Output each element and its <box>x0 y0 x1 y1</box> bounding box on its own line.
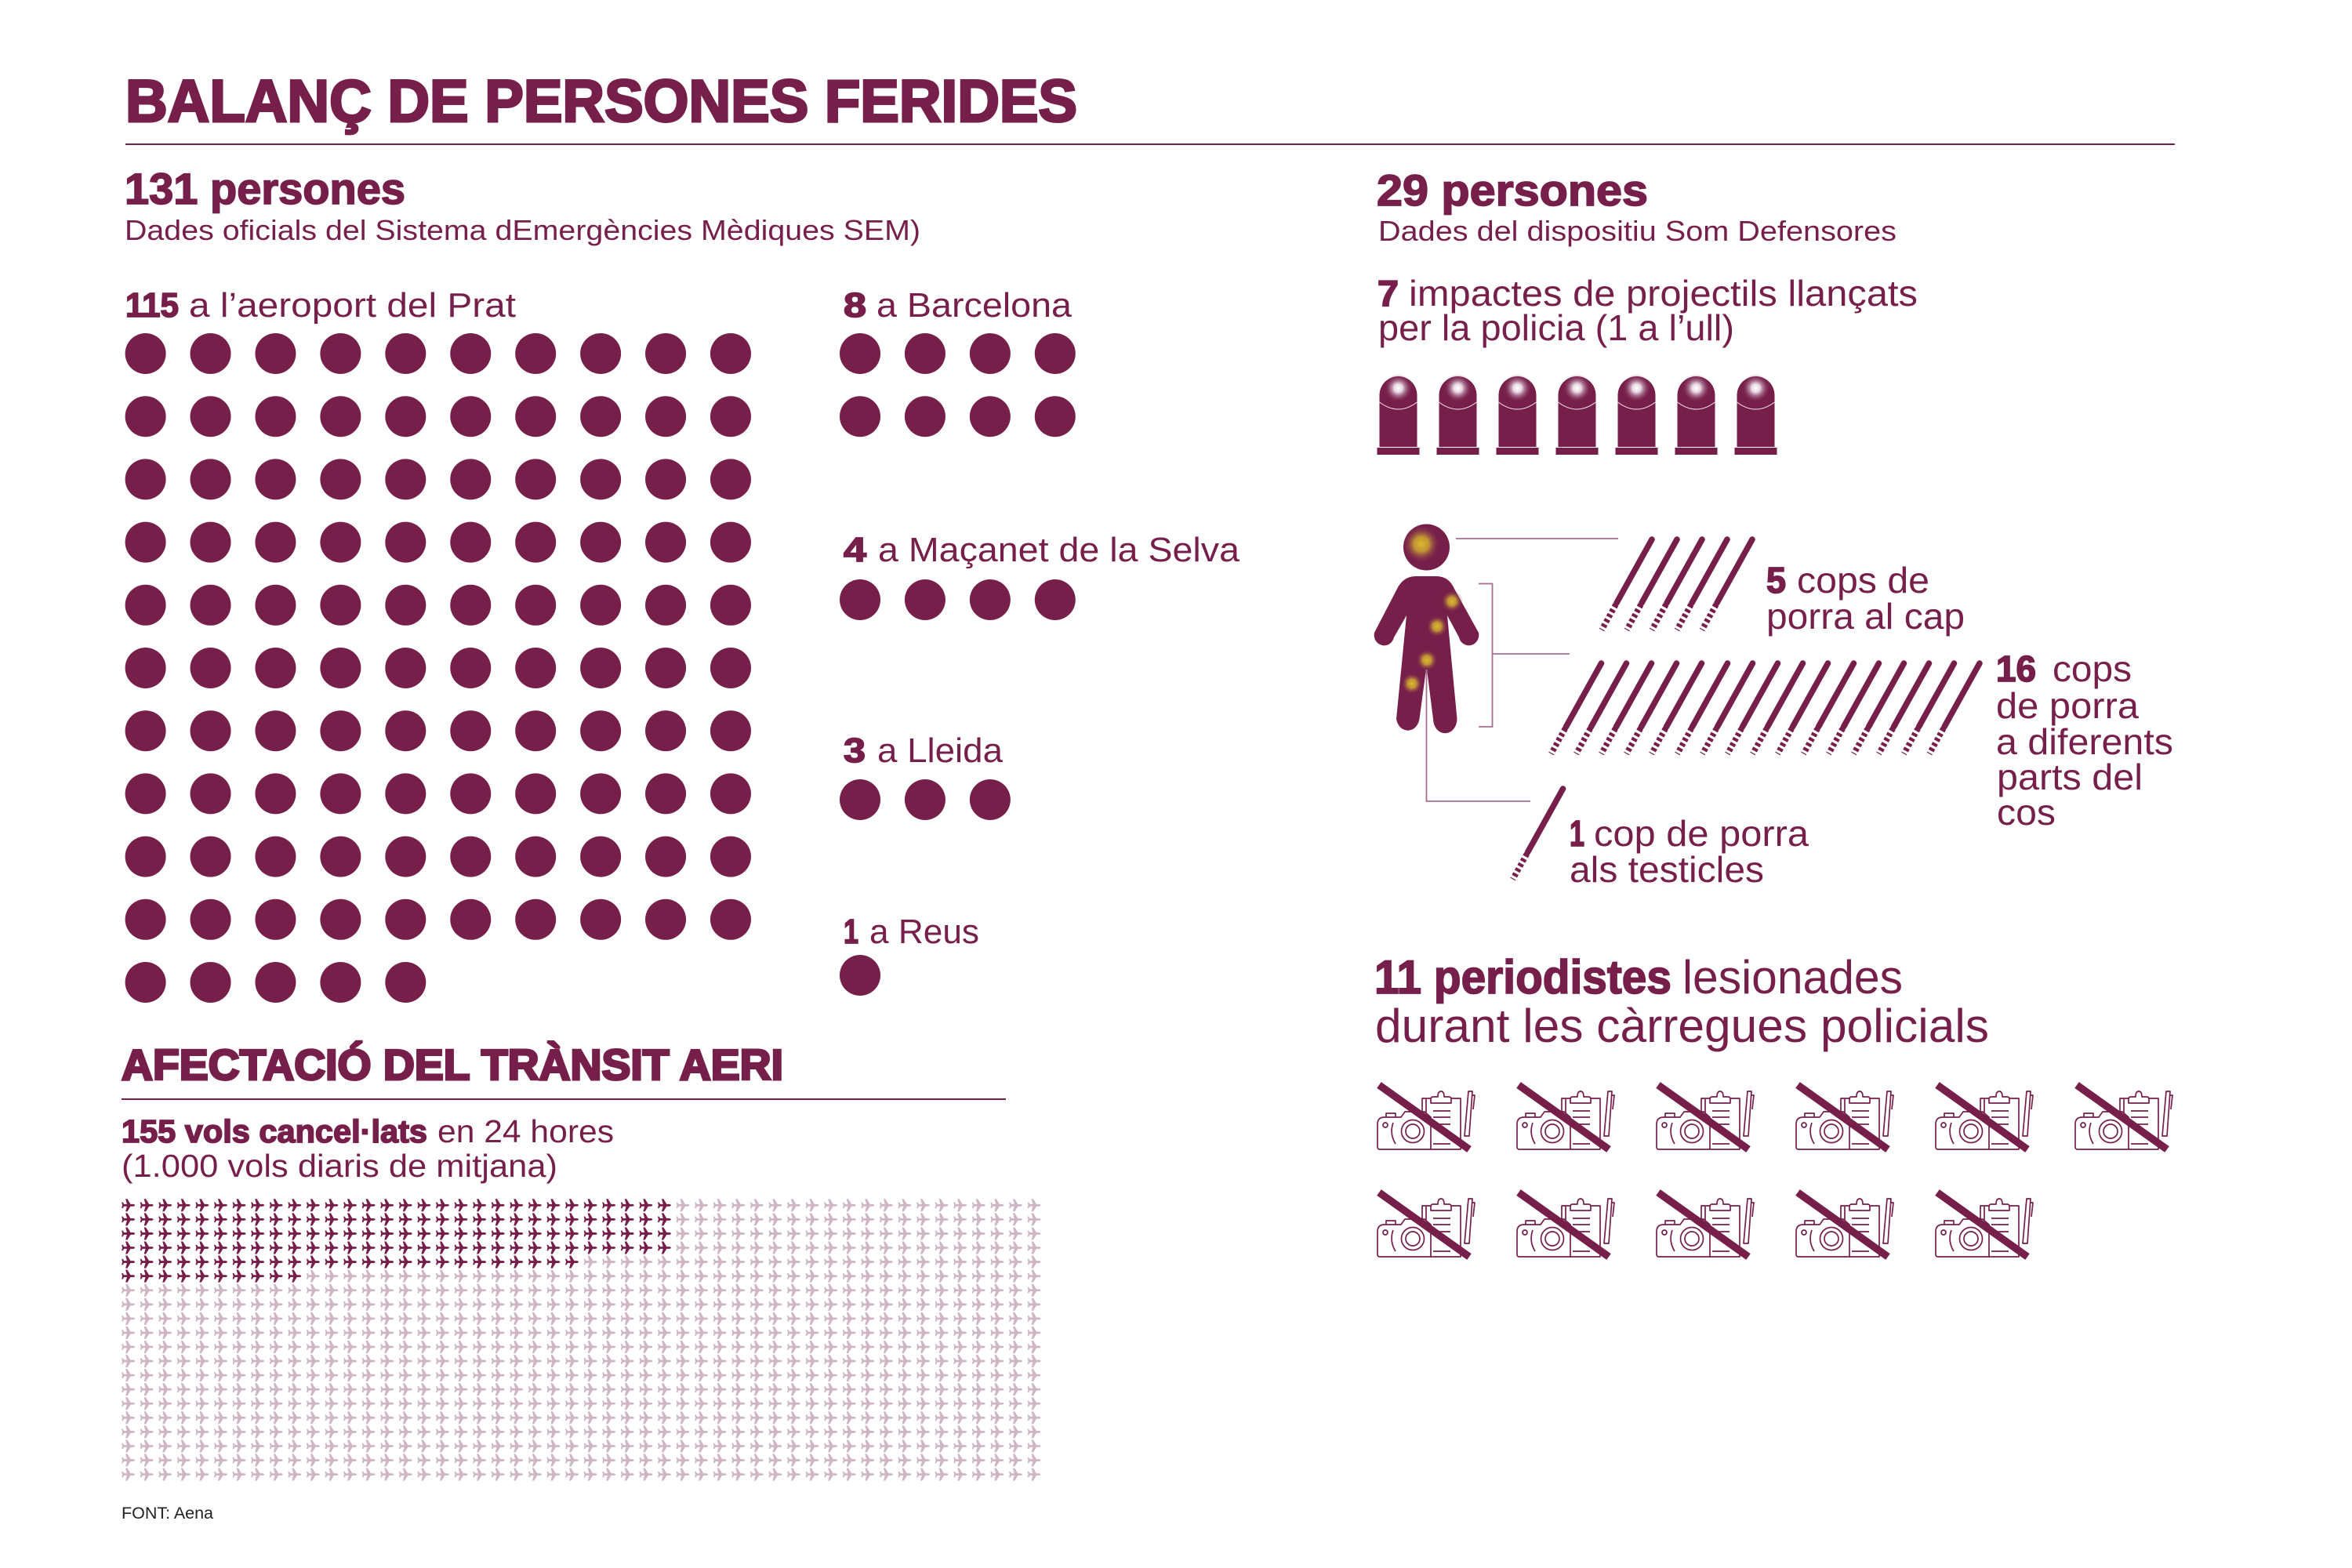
icon: 1 baton <box>1513 789 1563 880</box>
text: 7 projectile impacts: impactes de projectils llançats <box>1409 273 1918 314</box>
text: 1 baton hit to testicles: cop de porra <box>1594 813 1809 854</box>
heading: air traffic: AFECTACIÓ DEL TRÀNSIT AERI <box>122 1040 783 1089</box>
text: 1 baton hit to testicles: 1 <box>1570 813 1584 854</box>
heading: 131 persones: 131 persones <box>125 164 405 213</box>
label: 4 in Maçanet de la Selva: 4 <box>844 531 867 569</box>
panel: injured journalists <box>1374 951 2172 1257</box>
label: 115 at airport: a l’aeroport del Prat <box>189 286 516 325</box>
icons: 7 projectiles <box>1377 374 1777 455</box>
label: 8 in Barcelona: a Barcelona <box>877 286 1073 325</box>
label: 1 in Reus: a Reus <box>869 913 979 951</box>
heading: 11 journalists: lesionades <box>1682 951 1903 1004</box>
stat: 155 cancelled flights: en 24 hores <box>437 1113 614 1149</box>
dark planes: cancelled flights <box>122 1199 671 1283</box>
dots: 3 in Lleida <box>840 779 1011 820</box>
heading: 11 journalists: 11 periodistes <box>1374 951 1671 1004</box>
label: 8 in Barcelona: 8 <box>844 286 866 325</box>
text: 5 baton hits to head: cops de <box>1797 560 1929 601</box>
text: 7 projectile impacts: per la policia (1 a l’ull) <box>1378 307 1734 348</box>
heading: 11 journalists <box>1374 951 1989 1052</box>
text: 7 projectile impacts: 7 <box>1377 273 1399 314</box>
text: 16 baton hits to body: cops <box>2053 648 2132 689</box>
stat: daily average: (1.000 vols diaris de mitjana) <box>122 1148 557 1184</box>
title rule <box>125 143 2175 145</box>
text: 16 baton hits to body: a diferents <box>1996 721 2173 762</box>
label: 4 in Maçanet de la Selva: a Maçanet de la Selva <box>878 531 1240 569</box>
text: 16 baton hits to body: 16 <box>1996 648 2036 689</box>
icons: 16 batons <box>1551 663 1980 754</box>
subheading: official data source: Dades oficials del Sistema dEmergències Mèdiques SEM) <box>125 214 920 246</box>
dot grid: 115 at airport <box>125 333 751 1003</box>
source note: FONT: Aena <box>122 1504 213 1523</box>
title: BALANÇ DE PERSONES FERIDES <box>125 68 1077 135</box>
text: 16 baton hits to body: de porra <box>1996 685 2139 726</box>
text: 16 baton hits to body: parts del <box>1997 757 2143 797</box>
text: 1 baton hit to testicles: als testicles <box>1570 849 1764 890</box>
stat: 155 cancelled flights <box>122 1113 614 1149</box>
leader lines <box>1427 539 1618 801</box>
text: 5 baton hits to head <box>1766 560 1965 637</box>
text: 5 baton hits to head: porra al cap <box>1766 596 1965 637</box>
heading: 29 persones: 29 persones <box>1377 165 1648 215</box>
panel: Som Defensores count <box>1374 165 2173 890</box>
figure: injured person <box>1374 524 1479 733</box>
heading rule <box>122 1098 1006 1100</box>
label: 3 in Lleida: a Lleida <box>877 731 1004 770</box>
dots: 4 in Maçanet <box>840 579 1076 620</box>
subheading: data source: Dades del dispositiu Som Defensores <box>1378 215 1896 247</box>
text: 5 baton hits to head: 5 <box>1766 560 1786 601</box>
panel: official injured count <box>125 164 1240 1003</box>
heading: 11 journalists: durant les càrregues policials <box>1375 1000 1989 1052</box>
text: 1 baton hit to testicles <box>1570 813 1809 890</box>
dot: 1 in Reus <box>840 955 880 996</box>
icons: 11 crossed-out press kits <box>1377 1085 2172 1257</box>
label: 3 in Lleida: 3 <box>844 731 866 770</box>
light planes: flights operated <box>122 1199 1040 1481</box>
label: 115 at airport: 115 <box>125 286 179 325</box>
text: 7 projectile impacts <box>1377 273 1918 348</box>
stat: 155 cancelled flights: 155 vols cancel·lats <box>122 1113 427 1149</box>
text: 16 baton hits to body <box>1996 648 2173 833</box>
plane grid: 155 of 1000 flights <box>122 1199 1040 1481</box>
icons: 5 batons <box>1602 539 1752 630</box>
dots: 8 in Barcelona <box>840 333 1076 437</box>
text: 16 baton hits to body: cos <box>1997 792 2056 833</box>
label: 1 in Reus: 1 <box>844 913 858 951</box>
panel: air traffic <box>122 1040 1040 1523</box>
